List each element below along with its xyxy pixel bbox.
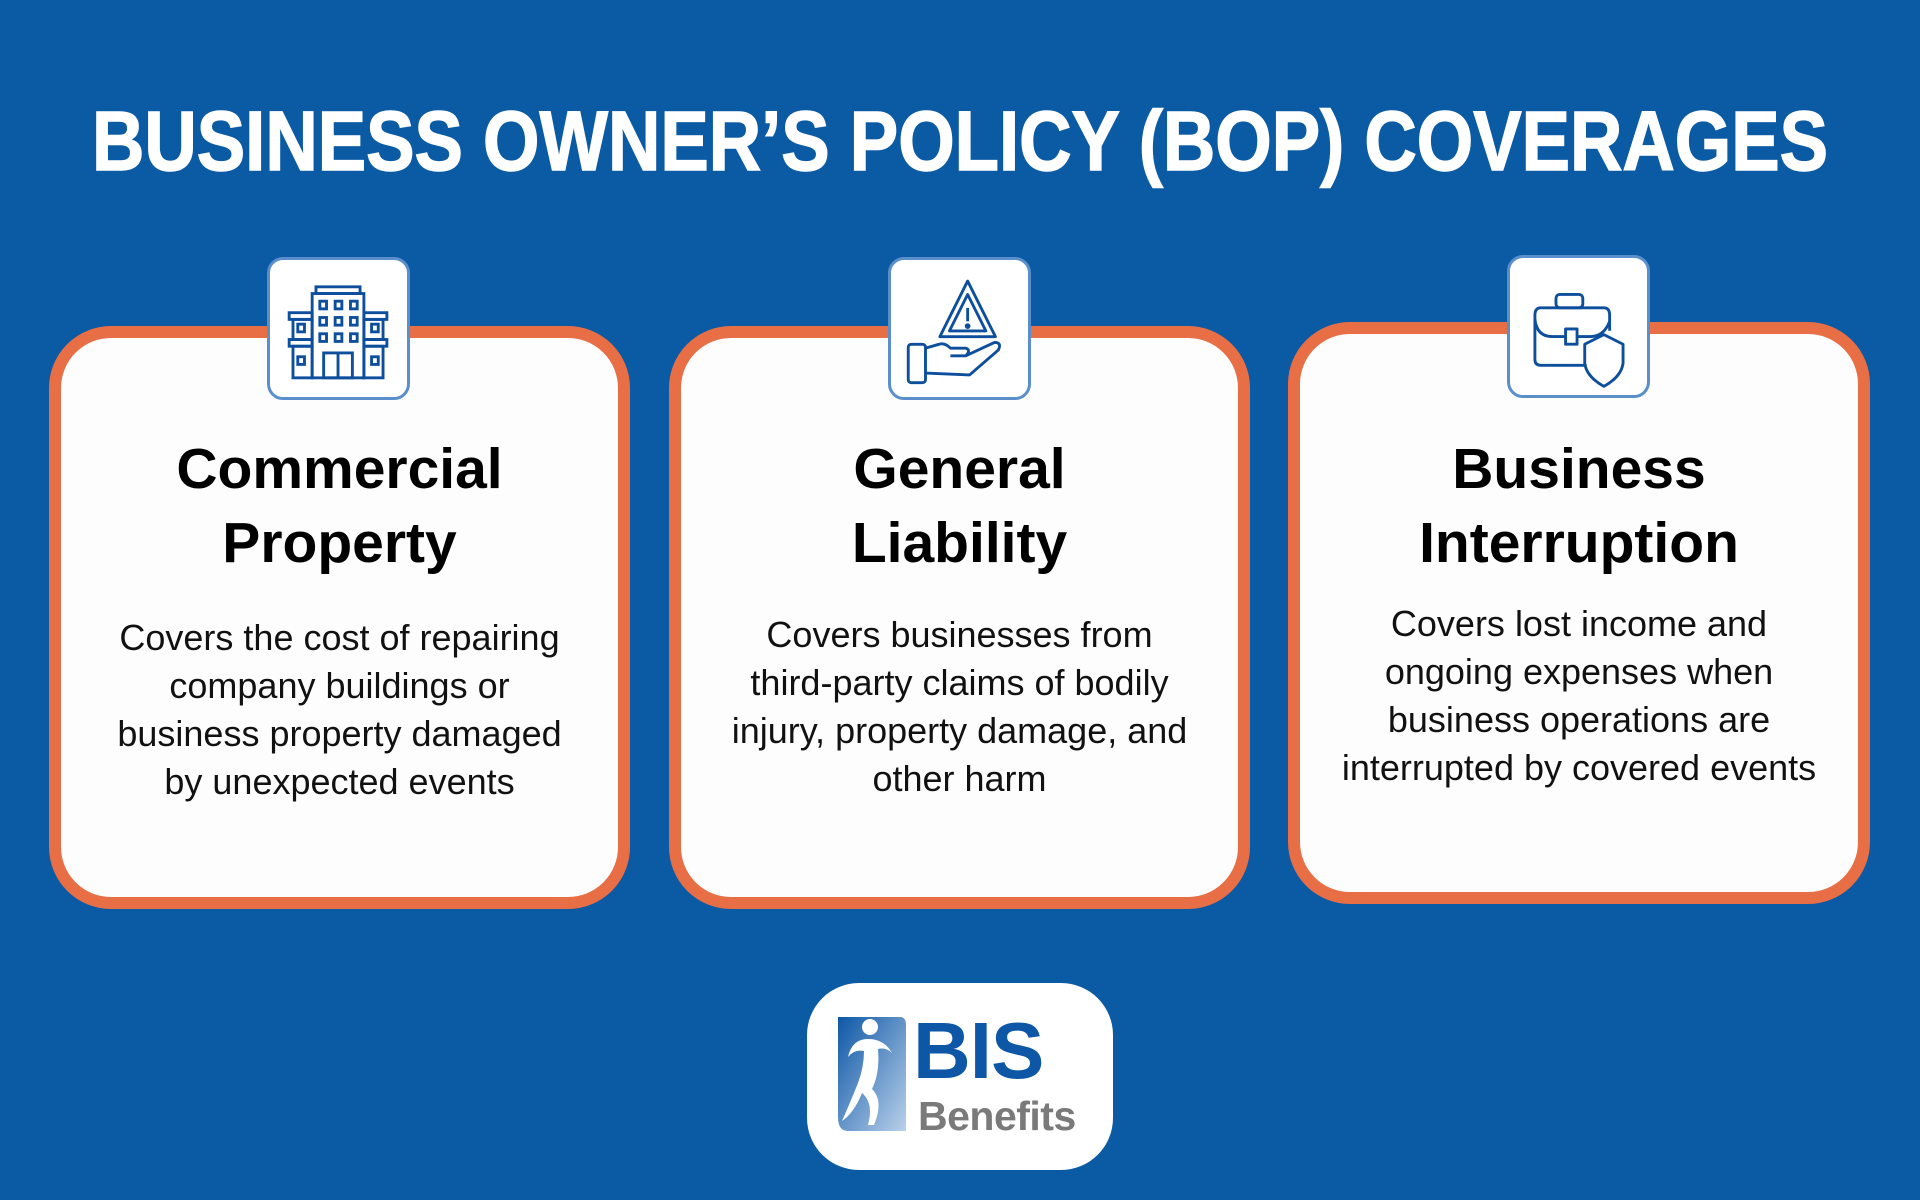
text: commercial property description: by unexpected events [164,761,515,802]
heading: business interruption: Business [1452,437,1706,501]
panel: commercial property [49,326,630,909]
text: commercial property description: Covers the cost of repairing [119,617,560,658]
text: BIS: BIS [913,1006,1043,1095]
heading: commercial property: Property [222,511,457,575]
text: general liability description [732,614,1187,799]
heading: commercial property [176,437,503,575]
heading: business interruption: Interruption [1419,511,1739,575]
text: commercial property description: company buildings or [169,665,510,706]
text: general liability description: injury, property damage, and [732,710,1187,751]
icon: building [267,257,410,400]
text: general liability description: third-party claims of bodily [750,662,1169,703]
heading: general liability: General [853,437,1066,501]
text: business interruption description: Covers lost income and [1391,603,1767,644]
heading: general liability [852,437,1067,575]
heading: commercial property: Commercial [176,437,503,501]
text: Benefits: Benefits [918,1093,1076,1139]
heading: business interruption [1419,437,1739,575]
icon: runner shield [838,1017,906,1131]
text: business interruption description: business operations are [1388,699,1770,740]
panel: general liability [669,326,1250,909]
text: commercial property description [117,617,562,802]
icon: hand with warning [888,257,1031,400]
logo: BIS Benefits [807,983,1113,1170]
text: business interruption description: interrupted by covered events [1342,747,1816,788]
panel: business interruption [1288,322,1870,904]
heading: general liability: Liability [852,511,1067,575]
text: general liability description: Covers businesses from [766,614,1153,655]
text: commercial property description: business property damaged [117,713,562,754]
icon: briefcase with shield [1507,255,1650,398]
text: business interruption description: ongoing expenses when [1385,651,1773,692]
text: business interruption description [1342,603,1816,788]
text: general liability description: other harm [872,758,1047,799]
